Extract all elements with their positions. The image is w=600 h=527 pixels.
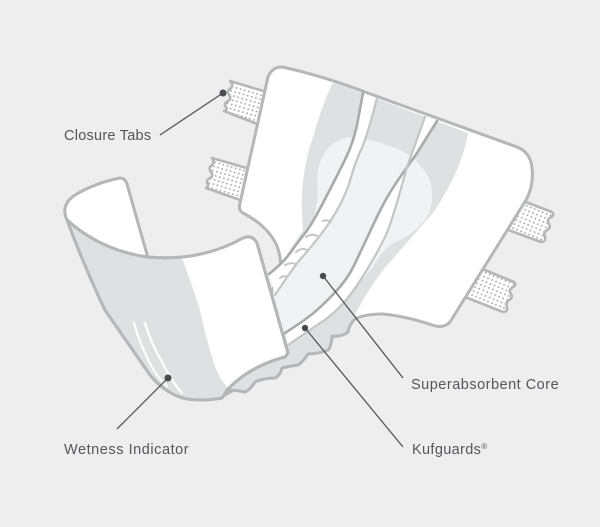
wetness indicator stripes [134, 323, 182, 393]
panel: front waist body [65, 178, 288, 400]
icon: closure tab upper right [500, 198, 553, 242]
left cuff white strip [269, 93, 377, 295]
callout: kufguards: Kufguards [412, 442, 481, 458]
leg frill [221, 300, 357, 398]
icon: closure tab upper left [224, 81, 270, 125]
gray wrap area [68, 222, 228, 399]
superabsorbent core [270, 137, 432, 335]
left cuff serration ticks [280, 220, 331, 278]
callout: kufguards: ® [481, 442, 488, 451]
callout: closure tabs [64, 90, 226, 144]
gray absorbent bands [270, 82, 468, 360]
callout: superabsorbent core [320, 273, 559, 393]
callout: kufguards [302, 325, 488, 458]
callout: wetness indicator [64, 374, 189, 458]
icon: closure tab lower right [460, 268, 515, 312]
outer panel fill [67, 220, 288, 400]
right cuff lines [285, 121, 437, 333]
back sheet fill and outline [220, 67, 532, 398]
right cuff white strip [285, 117, 437, 345]
callout: wetness indicator: Wetness Indicator [64, 442, 189, 458]
callout: superabsorbent core: Superabsorbent Core [411, 377, 559, 393]
inner back of front cup [65, 178, 148, 258]
left cuff lines [269, 93, 363, 274]
callout: closure tabs: Closure Tabs [64, 128, 151, 144]
icon: closure tab lower left [206, 158, 250, 201]
panel: back waist body [220, 67, 532, 398]
